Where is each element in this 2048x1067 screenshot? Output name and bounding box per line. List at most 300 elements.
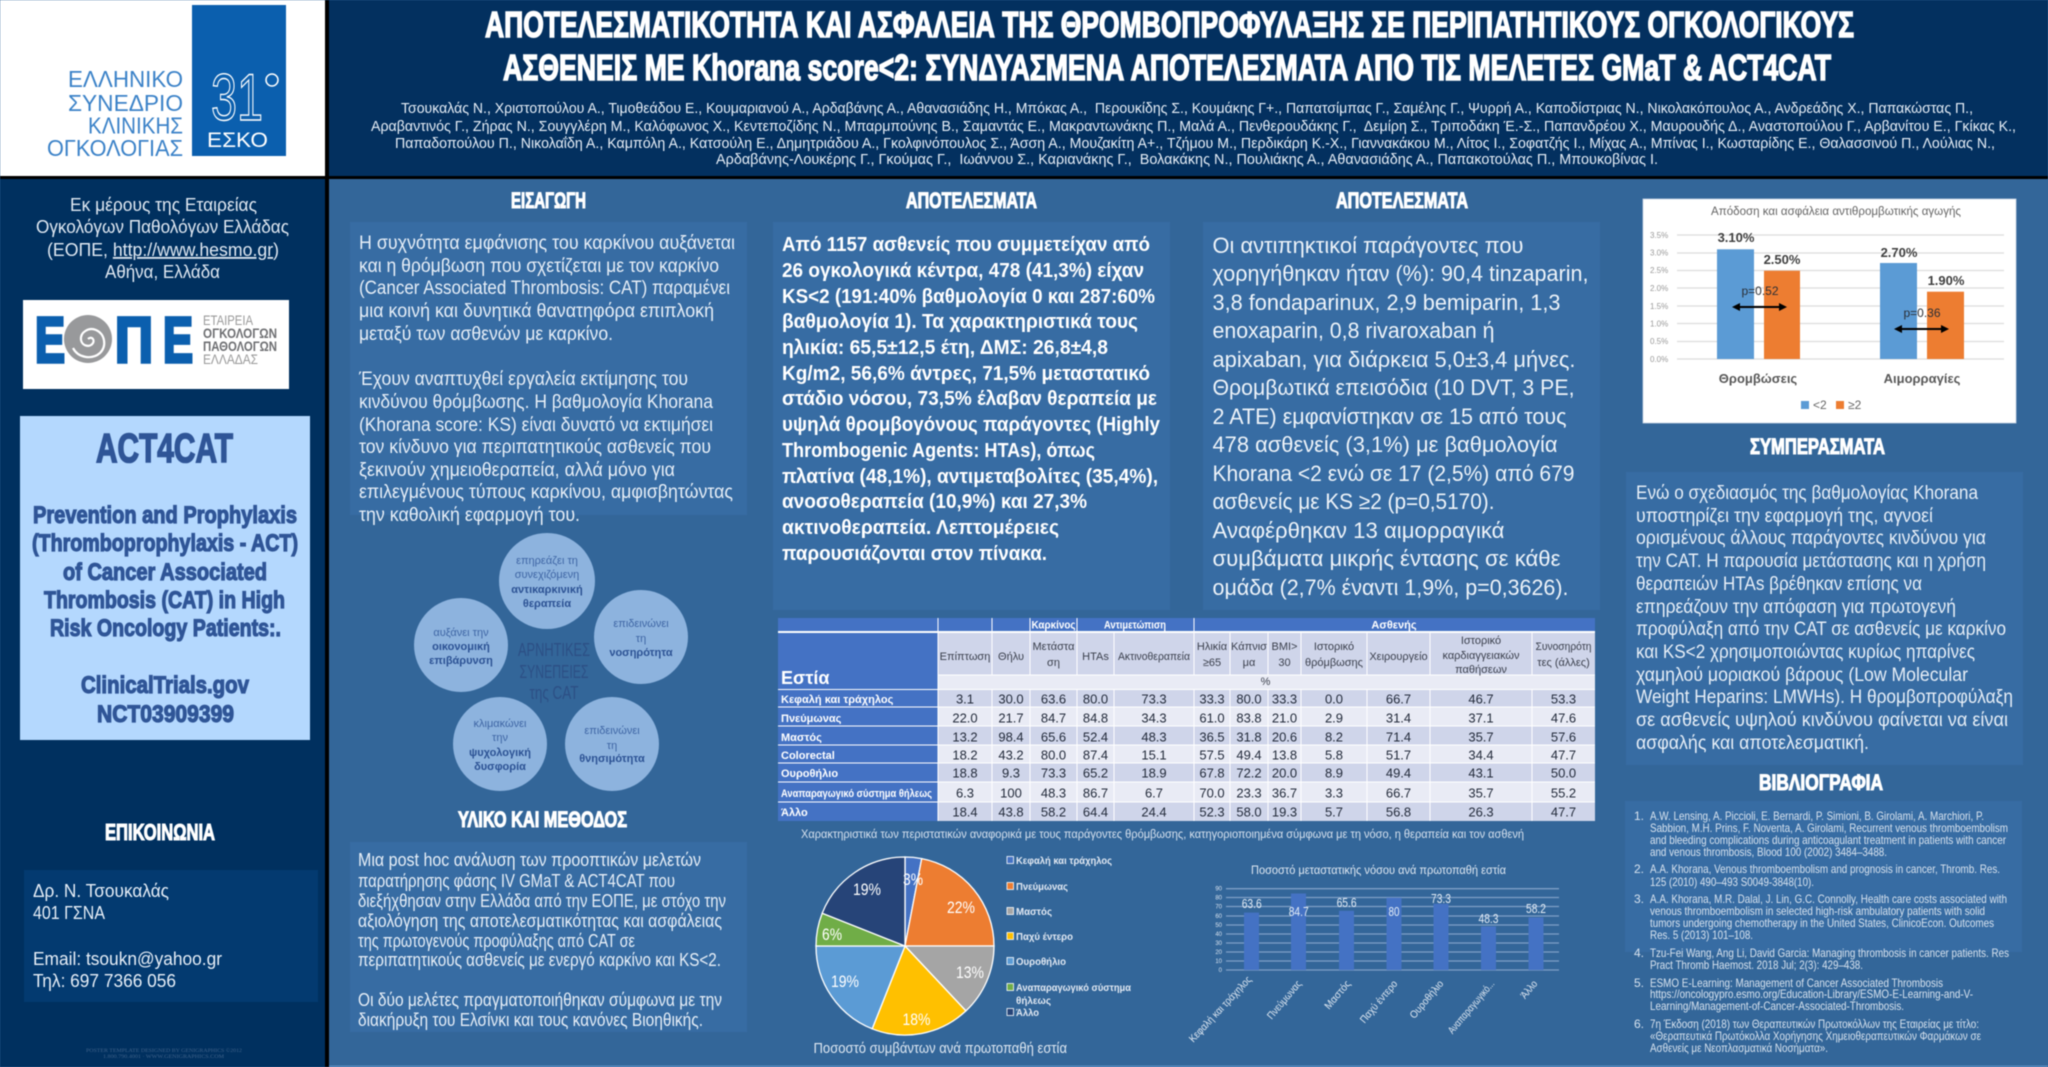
conference logo: 31st ESKO: ΚΛΙΝΙΚΗΣ [88, 112, 183, 138]
chart bars [1717, 249, 1964, 359]
ACT4CAT study box: Risk Oncology Patients:. [50, 615, 281, 642]
circle: economic burden: οικονομική [432, 641, 490, 653]
table values: 20.6 [1272, 730, 1297, 744]
diagram centre label: της CAT [530, 683, 578, 703]
chart: anticoagulant efficacy and safety: 2.5% [1650, 266, 1668, 275]
results panel 2: ομάδα (2,7% έναντι 1,9%, p=0,3626). [1212, 575, 1568, 600]
references list: 125 (2010) 490–493 S0049-3848(10). [1650, 875, 1814, 889]
table row labels: Αναπαραγωγικό σύστημα θήλεως [781, 788, 932, 800]
table values: 80.0 [1041, 748, 1066, 762]
table values: 87.4 [1083, 748, 1108, 762]
bar value labels: 58.2 [1526, 901, 1546, 916]
template credit: POSTER TEMPLATE DESIGNED BY GENIGRAPHICS ©2012 [86, 1047, 242, 1054]
table values: 9.3 [1002, 766, 1020, 780]
chart: anticoagulant efficacy and safety: 3.5% [1650, 231, 1668, 240]
table values: 51.7 [1386, 748, 1411, 762]
conference logo: 31st ESKO: ΣΥΝΕΔΡΙΟ [68, 90, 183, 116]
pie percentage labels: 18% [902, 1010, 930, 1029]
references list: Ασθενείς με Νεοπλασματικά Νοσήματα». [1650, 1041, 1828, 1055]
table values: 67.8 [1199, 766, 1225, 780]
table values: 36.7 [1272, 786, 1297, 800]
references list: A.W. Lensing, A. Piccioli, E. Bernardi, P. Simioni, B. Girolami, A. Marchiori, P. [1650, 809, 1984, 823]
introduction panel: Η συχνότητα εμφάνισης του καρκίνου αυξάνεται [359, 233, 735, 254]
bar chart: metastatic disease by primary site: 90 [1215, 887, 1223, 893]
methods panel: Μια post hoc ανάλυση των προοπτικών μελετών [358, 850, 701, 870]
table values: 6.7 [1145, 786, 1163, 800]
bar chart: metastatic disease by primary site: 80 [1215, 896, 1223, 902]
chart data labels: 2.70% [1881, 245, 1918, 260]
table column headers: θρόμβωσης [1305, 657, 1363, 669]
results panel 1 [773, 222, 1170, 610]
table values: 34.4 [1468, 748, 1494, 762]
results panel 1: πλατίνα (48,1%), αντιμεταβολίτες (35,4%), [782, 466, 1158, 488]
table column headers: Ιστορικό [1461, 635, 1501, 647]
results heading 2: ΑΠΟΤΕΛΕΣΜΑΤΑ [1336, 188, 1468, 213]
EOPE society logo: ΟΓΚΟΛΟΓΩΝ [203, 326, 277, 341]
introduction heading: ΕΙΣΑΓΩΓΗ [511, 188, 586, 213]
diagram centre label [518, 640, 590, 703]
table values: 35.7 [1468, 730, 1494, 744]
circle: psychological distress [453, 697, 547, 791]
ACT4CAT study box: ACT4CAT [96, 425, 233, 471]
introduction panel: μεταξύ των ασθενών με καρκίνο. [359, 324, 613, 345]
introduction panel [350, 222, 747, 526]
table row labels: Κεφαλή και τράχηλος [781, 694, 894, 706]
results panel 1: Thrombogenic Agents: HTAs), όπως [782, 440, 1095, 462]
affiliation text [36, 195, 289, 282]
references list: 5. [1634, 976, 1644, 990]
results panel 2: 2 ATE) εμφανίστηκαν σε 15 από τους [1212, 404, 1566, 429]
circle: economic burden: επιβάρυνση [429, 655, 493, 667]
pie title: Ποσοστό συμβάντων ανά πρωτοπαθή εστία [814, 1041, 1067, 1057]
methods panel: διακήρυξη του Ελσίνκι και τους κανόνες Βιοηθικής. [358, 1010, 703, 1030]
table values: 46.7 [1468, 692, 1494, 706]
pie legend: Κεφαλή και τράχηλος [1016, 855, 1112, 867]
ACT4CAT study box: NCT03909399 [97, 701, 234, 728]
chart category labels: Θρομβώσεις [1719, 371, 1797, 386]
results panel 1: Kg/m2, 56,6% άντρες, 71,5% μεταστατικό [782, 363, 1150, 385]
pie percentage labels: 19% [831, 972, 859, 991]
results section 2 [1203, 188, 1600, 610]
conclusions panel: την CAT. Η παρουσία μετάστασης και η χρήση [1636, 551, 1986, 572]
table values: 70.0 [1199, 786, 1225, 800]
introduction panel: επιλεγμένους τύπους καρκίνου, αμφισβητώντας [359, 482, 733, 503]
table column headers: παθήσεων [1455, 664, 1507, 676]
contact heading: ΕΠΙΚΟΙΝΩΝΙΑ [105, 819, 215, 845]
introduction panel: τον κίνδυνο για περιπατητικούς ασθενείς που [359, 437, 711, 458]
table values: 84.8 [1083, 710, 1108, 726]
references list: 7η Έκδοση (2018) των Θεραπευτικών Πρωτοκόλλων της Εταιρείας με τίτλο: [1650, 1017, 1979, 1031]
introduction panel: και η θρόμβωση που σχετίζεται με τον καρκίνο [359, 256, 719, 277]
bar category labels: Παχύ έντερο [1358, 978, 1400, 1026]
affiliation text: Ογκολόγων Παθολόγων Ελλάδας [36, 217, 289, 237]
bar chart: metastatic disease by primary site: 50 [1215, 923, 1223, 929]
bar value labels: 84.7 [1289, 904, 1309, 919]
table column headers: % [1261, 676, 1271, 688]
table column headers: Επίπτωση [940, 651, 990, 663]
methods panel: παρατήρησης φάσης IV GMaT & ACT4CAT που [358, 871, 675, 891]
table column headers: HTAs [1082, 651, 1109, 663]
table column headers: Θήλυ [998, 651, 1024, 663]
circle: psychological distress: κλιμακώνει [474, 718, 527, 730]
table values: 8.9 [1325, 766, 1343, 780]
bar value labels: 73.3 [1431, 891, 1451, 906]
table values: 57.6 [1551, 730, 1576, 744]
table values: 18.4 [952, 804, 978, 820]
table values: 66.7 [1386, 786, 1411, 800]
table values: 0.0 [1325, 692, 1343, 706]
conference logo: 31st ESKO: ΟΓΚΟΛΟΓΙΑΣ [47, 135, 183, 161]
table values: 52.4 [1083, 730, 1108, 744]
ACT4CAT study box: Thrombosis (CAT) in High [44, 587, 285, 614]
pie percentage labels: 3% [903, 870, 923, 889]
circle: anticancer therapy: επηρεάζει τη [516, 555, 578, 567]
introduction panel: Έχουν αναπτυχθεί εργαλεία εκτίμησης του [358, 369, 688, 390]
table values: 72.2 [1236, 766, 1262, 780]
results panel 2: 3,8 fondaparinux, 2,9 bemiparin, 1,3 [1212, 290, 1560, 315]
table column headers: Ιστορικό [1314, 641, 1354, 653]
bar value labels [1242, 891, 1546, 926]
pie legend: Παχύ έντερο [1016, 931, 1073, 943]
table column headers: καρδιαγγειακών [1442, 650, 1520, 662]
pie percentage labels: 19% [853, 880, 881, 899]
diagram centre label: ΣΥΝΕΠΕΙΕΣ [520, 662, 588, 682]
bar chart: metastatic disease by primary site [1187, 863, 1559, 1045]
table values: 8.2 [1325, 730, 1343, 744]
authors: Αρδαβάνης-Λουκέρης Γ., Γκούμας Γ., Ιωάννου Σ., Καριανάκης Γ., Βολακάκης Ν., Πουλιάκης Α., Αθανασιάδης Α., Παπακοτούλας Π., Μπουκοβίνας Ι. [716, 151, 1658, 168]
table group headers: Αντιμετώπιση [1104, 620, 1166, 632]
table values: 5.8 [1325, 748, 1343, 762]
table values: 47.7 [1551, 804, 1576, 820]
table values: 20.0 [1272, 766, 1297, 780]
chart: anticoagulant efficacy and safety: 0.0% [1650, 355, 1668, 364]
diagram: negative consequences of CAT [414, 533, 688, 791]
table group headers [1032, 620, 1417, 632]
results panel 1: Από 1157 ασθενείς που συμμετείχαν από [782, 234, 1150, 256]
methods section [350, 807, 747, 1032]
table values: 18.8 [952, 766, 978, 780]
references list: Pract Thromb Haemost. 2018 Jul; 2(3): 429–438. [1650, 958, 1863, 972]
results panel 1: ηλικία: 65,5±12,5 έτη, ΔΜΣ: 26,8±4,8 [782, 337, 1108, 359]
chart: anticoagulant efficacy and safety: 2.0% [1650, 284, 1668, 293]
results panel 1: ανοσοθεραπεία (10,9%) και 27,3% [782, 491, 1087, 513]
circle: anticancer therapy [499, 533, 595, 629]
conclusions panel: προφύλαξη από την CAT σε ασθενείς με καρκίνο [1636, 619, 2006, 640]
conclusions panel: θεραπειών HTAs βρέθηκαν επίσης να [1636, 574, 1922, 595]
table values: 23.3 [1236, 786, 1262, 800]
EOPE society logo: Π [115, 304, 153, 376]
p value labels [1741, 284, 1941, 320]
diagram centre label: ΑΡΝΗΤΙΚΕΣ [518, 640, 590, 660]
results heading 1: ΑΠΟΤΕΛΕΣΜΑΤΑ [906, 188, 1037, 213]
references list: 1. [1634, 809, 1644, 823]
references list [1625, 801, 2022, 1055]
conclusions panel [1626, 472, 2023, 765]
chart: anticoagulant efficacy and safety: 3.0% [1650, 248, 1668, 258]
references list: 3. [1634, 892, 1644, 906]
table values: 48.3 [1141, 730, 1167, 744]
chart data labels [1718, 230, 1965, 288]
contact panel: 401 ΓΣΝΑ [33, 903, 105, 923]
contact panel: Email: tsoukn@yahoo.gr [33, 949, 222, 969]
table values: 2.9 [1325, 710, 1343, 726]
table column headers: Ηλικία [1197, 641, 1228, 653]
table values: 80.0 [1083, 692, 1108, 706]
chart data labels: 3.10% [1718, 230, 1755, 245]
pie legend [1007, 855, 1131, 1019]
conclusions section [1626, 434, 2023, 765]
table values: 57.5 [1199, 748, 1225, 762]
authors: Τσουκαλάς Ν., Χριστοπούλου Α., Τιμοθεάδου Ε., Κουμαριανού Α., Αρδαβάνης Α., Αθανασιάδης Η., Μπόκας Α., Περουκίδης Σ., Κουμάκης Γ+., Παπατσίμπας Γ., Σαμέλης Γ., Ψυρρή Α., Καποδίστριας Ν., Νικολακόπουλος Α., Ανδρεάδης Χ., Παπακώστας Π., [401, 100, 1973, 117]
table values: 34.3 [1141, 710, 1167, 726]
EOPE society logo: ΠΑΘΟΛΟΓΩΝ [203, 339, 277, 354]
bar value labels: 80 [1388, 904, 1400, 919]
conclusions panel: και KS<2 χρησιμοποιώντας κυρίως ηπαρίνες [1636, 642, 1975, 663]
table values: 18.2 [952, 748, 978, 762]
table values: 47.7 [1551, 748, 1576, 762]
chart legend: <2 [1813, 398, 1827, 412]
methods panel: αξιολόγηση της αποτελεσματικότητας και ασφάλειας [358, 911, 722, 931]
table row labels: Πνεύμωνας [781, 713, 842, 725]
references heading: ΒΙΒΛΙΟΓΡΑΦΙΑ [1759, 770, 1883, 795]
table values: 35.7 [1468, 786, 1494, 800]
references list: 4. [1634, 946, 1644, 960]
authors: Παπαδοπούλου Π., Νικολαΐδη Α., Καμπόλη Α., Κατσούλη Ε., Δημητριάδου Α., Γκολφινόπουλος Σ., Άσση Α., Μουζακίτη Α+., Τζήμου Μ., Περδικάρη Κ.-Χ., Γιαννακάκου Μ., Λίτος Ι., Σοφατζής Ι., Μίχας Α., Μπίνας Ι., Κωσταρίδης Ε., Θαλασσινού Π., Λούλιας Ν., [395, 135, 1995, 152]
circle: morbidity [594, 590, 688, 684]
bar category labels: Άλλο [1518, 978, 1540, 1001]
table values: 98.4 [998, 730, 1024, 744]
table row labels: Ουροθήλιο [781, 768, 838, 780]
results panel 2: ασθενείς με KS ≥2 (p=0,5170). [1212, 489, 1494, 514]
table column headers: μα [1243, 657, 1256, 669]
introduction section [350, 188, 747, 526]
EOPE society logo: ΕΤΑΙΡΕΙΑ [203, 313, 253, 328]
results panel 1: ακτινοθεραπεία. Λεπτομέρειες [782, 517, 1059, 539]
table values: 18.9 [1141, 766, 1167, 780]
references list: ESMO E-Learning: Management of Cancer Associated Thrombosis [1650, 976, 1943, 990]
circle: morbidity: επιδεινώνει [613, 618, 669, 630]
EOPE society logo: Ε [35, 304, 65, 376]
conference logo: 31st ESKO: 31 [211, 60, 263, 134]
circle: psychological distress: ψυχολογική [469, 747, 531, 759]
references list: «Θεραπευτικά Πρωτόκολλα Χορήγησης Χημειοθεραπευτικών Φαρμάκων σε [1650, 1029, 1982, 1043]
chart: anticoagulant efficacy and safety: 0.5% [1650, 337, 1668, 346]
circle: psychological distress: δυσφορία [474, 761, 526, 773]
conference logo: 31st ESKO [0, 0, 325, 176]
bar chart: metastatic disease by primary site: 40 [1215, 932, 1223, 938]
table values [952, 692, 1576, 820]
references list: https://oncologypro.esmo.org/Education-Library/ESMO-E-Learning-and-V- [1650, 987, 1973, 1001]
table values: 24.4 [1141, 804, 1167, 820]
circle: mortality: θνησιμότητα [579, 753, 645, 765]
chart category labels: Αιμορραγίες [1884, 371, 1961, 386]
table values: 21.7 [998, 710, 1024, 726]
table values: 33.3 [1272, 692, 1297, 706]
bar category labels [1187, 974, 1540, 1045]
table values: 65.6 [1041, 730, 1066, 744]
results panel 2: 478 ασθενείς (3,1%) με βαθμολογία [1212, 432, 1558, 457]
template credit [86, 1047, 242, 1060]
table values: 53.3 [1551, 692, 1576, 706]
methods heading: ΥΛΙΚΟ ΚΑΙ ΜΕΘΟΔΟΣ [458, 807, 627, 832]
pie legend: Άλλο [1016, 1007, 1039, 1019]
pie legend: Ουροθήλιο [1016, 956, 1066, 968]
bar chart: metastatic disease by primary site: 30 [1215, 941, 1223, 947]
methods panel: Οι δύο μελέτες πραγματοποιήθηκαν σύμφωνα με την [358, 990, 722, 1010]
references list: and venous thrombosis, Blood 100 (2002) 3484–3488. [1650, 845, 1887, 859]
circle: anticancer therapy: θεραπεία [523, 598, 571, 610]
results panel 2: συμβάματα μικρής έντασης σε κάθε [1212, 546, 1561, 571]
p value labels: p=0.52 [1741, 284, 1779, 298]
table values: 58.2 [1041, 804, 1066, 820]
chart category labels [1719, 371, 1961, 386]
references section [1625, 770, 2022, 1055]
pie percentage labels: 6% [822, 925, 842, 944]
table values: 33.3 [1199, 692, 1225, 706]
chart legend: ≥2 [1848, 398, 1862, 412]
pie legend: Μαστός [1016, 906, 1052, 918]
table column headers: BMI> [1272, 641, 1297, 653]
results panel 2: Αναφέρθηκαν 13 αιμορραγικά [1212, 518, 1505, 543]
table values: 43.1 [1468, 766, 1494, 780]
introduction panel: την καθολική εφαρμογή του. [359, 505, 580, 526]
circle: anticancer therapy: αντικαρκινική [511, 584, 583, 596]
table values: 56.8 [1386, 804, 1411, 820]
bar chart: metastatic disease by primary site: 10 [1215, 959, 1223, 965]
circle: mortality: τη [607, 740, 617, 752]
circle: morbidity: τη [636, 633, 646, 645]
conclusions panel: υποστηρίζει την εφαρμογή της, αγνοεί [1636, 506, 1934, 527]
table values: 64.4 [1083, 804, 1108, 820]
bar category labels: Κεφαλή και τράχηλος [1187, 974, 1254, 1045]
ACT4CAT study box: of Cancer Associated [63, 559, 267, 586]
table values: 66.7 [1386, 692, 1411, 706]
table values: 49.4 [1236, 748, 1262, 762]
introduction panel: μια κοινή και δυνητικά θανατηφόρα επιπλοκή [359, 301, 714, 322]
bar value labels: 65.6 [1337, 895, 1357, 910]
circle: mortality: επιδεινώνει [584, 725, 640, 737]
conclusions panel: ορισμένους άλλους παράγοντες κινδύνου για [1636, 528, 1986, 549]
bar chart title: Ποσοστό μεταστατικής νόσου ανά πρωτοπαθή εστία [1251, 863, 1506, 877]
table values: 61.0 [1199, 710, 1225, 726]
results panel 1: KS<2 (191:40% βαθμολογία 0 και 287:60% [782, 286, 1155, 308]
bar category labels: Αναπαραγωγικό... [1446, 978, 1497, 1036]
results panel 2: χορηγήθηκαν ήταν (%): 90,4 tinzaparin, [1212, 261, 1588, 286]
p value labels: p=0.36 [1903, 306, 1941, 320]
table values: 50.0 [1551, 766, 1576, 780]
EOPE society logo: Ε [163, 304, 193, 376]
references list: 2. [1634, 862, 1644, 876]
table row labels: Μαστός [781, 732, 822, 744]
table values: 3.1 [956, 692, 974, 706]
table values: 36.5 [1199, 730, 1225, 744]
ACT4CAT study box: ClinicalTrials.gov [81, 672, 250, 699]
bars [1244, 894, 1544, 970]
table values: 13.8 [1272, 748, 1297, 762]
contact panel: Τηλ: 697 7366 056 [33, 971, 176, 991]
table column headers: Χειρουργείο [1369, 651, 1428, 663]
table values: 13.2 [952, 730, 978, 744]
chart: anticoagulant efficacy and safety: 1.0% [1650, 320, 1668, 328]
table column headers: Συνοσηρότη [1536, 641, 1592, 653]
conclusions heading: ΣΥΜΠΕΡΑΣΜΑΤΑ [1750, 434, 1885, 459]
table values: 86.7 [1083, 786, 1108, 800]
results panel 1: βαθμολογία 1). Τα χαρακτηριστικά τους [782, 311, 1138, 333]
table values: 31.4 [1386, 710, 1411, 726]
table values: 73.3 [1141, 692, 1167, 706]
ACT4CAT study box: (Thromboprophylaxis - ACT) [32, 530, 298, 557]
conclusions panel: επηρεάζουν την απόφαση για πρωτογενή [1636, 597, 1956, 618]
conclusions panel: Ενώ ο σχεδιασμός της βαθμολογίας Khorana [1636, 483, 1978, 504]
table row labels: Colorectal [781, 750, 835, 762]
contact panel [24, 870, 318, 1002]
conclusions panel: ασφαλής και αποτελεσματική. [1636, 733, 1869, 754]
table values: 84.7 [1041, 710, 1066, 726]
table values: 71.4 [1386, 730, 1411, 744]
pie chart: events by primary site [814, 855, 1131, 1057]
table values: 37.1 [1468, 710, 1494, 726]
conference logo: 31st ESKO: ΕΛΛΗΝΙΚΟ [68, 66, 183, 92]
circle: mortality [565, 697, 659, 791]
table values: 80.0 [1236, 692, 1262, 706]
pie percentage labels: 22% [947, 898, 975, 917]
table values: 3.3 [1325, 786, 1343, 800]
table caption: Χαρακτηριστικά των περιστατικών αναφορικά με τους παράγοντες θρόμβωσης, κατηγοριοποιημένα σύμφωνα με τη νόσο, η θεραπεία και τον ασθενή [801, 827, 1524, 841]
table column headers [781, 635, 1592, 688]
table values: 48.3 [1041, 786, 1066, 800]
table values: 21.0 [1272, 710, 1297, 726]
table values: 55.2 [1551, 786, 1576, 800]
conclusions panel: χαμηλού μοριακού βάρους (Low Molecular [1636, 665, 1969, 686]
pie legend: Αναπαραγωγικό σύστημα [1016, 982, 1131, 994]
table values: 43.2 [998, 748, 1024, 762]
methods panel: της πρωτογενούς προφύλαξης από CAT σε [358, 931, 635, 951]
pie legend: Πνεύμωνας [1016, 881, 1068, 893]
table values: 65.2 [1083, 766, 1108, 780]
results panel 1: παρουσιάζονται στον πίνακα. [782, 543, 1047, 565]
chart legend [1801, 398, 1862, 412]
table group headers: Καρκίνος [1032, 620, 1076, 632]
introduction panel: ξεκινούν χημειοθεραπεία, αλλά μόνο για [359, 460, 675, 481]
authors [371, 100, 2016, 168]
introduction panel: (Cancer Associated Thrombosis: CAT) παραμένει [359, 278, 730, 299]
conclusions panel: σε ασθενείς υψηλού κινδύνου φαίνεται να είναι [1636, 710, 2008, 731]
table values: 49.4 [1386, 766, 1411, 780]
circle: economic burden [414, 598, 508, 692]
table values: 83.8 [1236, 710, 1262, 726]
chart data labels: 2.50% [1764, 252, 1801, 267]
affiliation text: (ΕΟΠΕ, http://www.hesmo.gr) [47, 240, 279, 260]
pie legend: θήλεως [1016, 995, 1051, 1007]
table row labels: Άλλο [781, 807, 808, 819]
bar chart: metastatic disease by primary site: 60 [1215, 914, 1223, 920]
results section 1 [773, 188, 1170, 610]
table group headers: Ασθενής [1371, 620, 1417, 632]
arrow: thrombosis comparison [1732, 303, 1787, 311]
references list: 6. [1634, 1017, 1644, 1031]
results panel 1: 26 ογκολογικά κέντρα, 478 (41,3%) είχαν [782, 260, 1144, 282]
table values: 58.0 [1236, 804, 1262, 820]
references list: Res. 5 (2013) 101–108. [1650, 928, 1753, 942]
bar chart: metastatic disease by primary site: 0 [1219, 968, 1223, 974]
introduction panel: (Khorana score: KS) είναι δυνατό να εκτιμήσει [359, 415, 713, 436]
table column headers: ≥65 [1203, 657, 1221, 669]
bar value labels: 48.3 [1478, 911, 1498, 926]
conference logo: 31st ESKO: ΕΣΚΟ [207, 129, 268, 152]
table column headers: ση [1047, 657, 1060, 669]
circle: anticancer therapy: συνεχιζόμενη [515, 569, 579, 581]
table column headers: τες (άλλες) [1537, 657, 1590, 669]
